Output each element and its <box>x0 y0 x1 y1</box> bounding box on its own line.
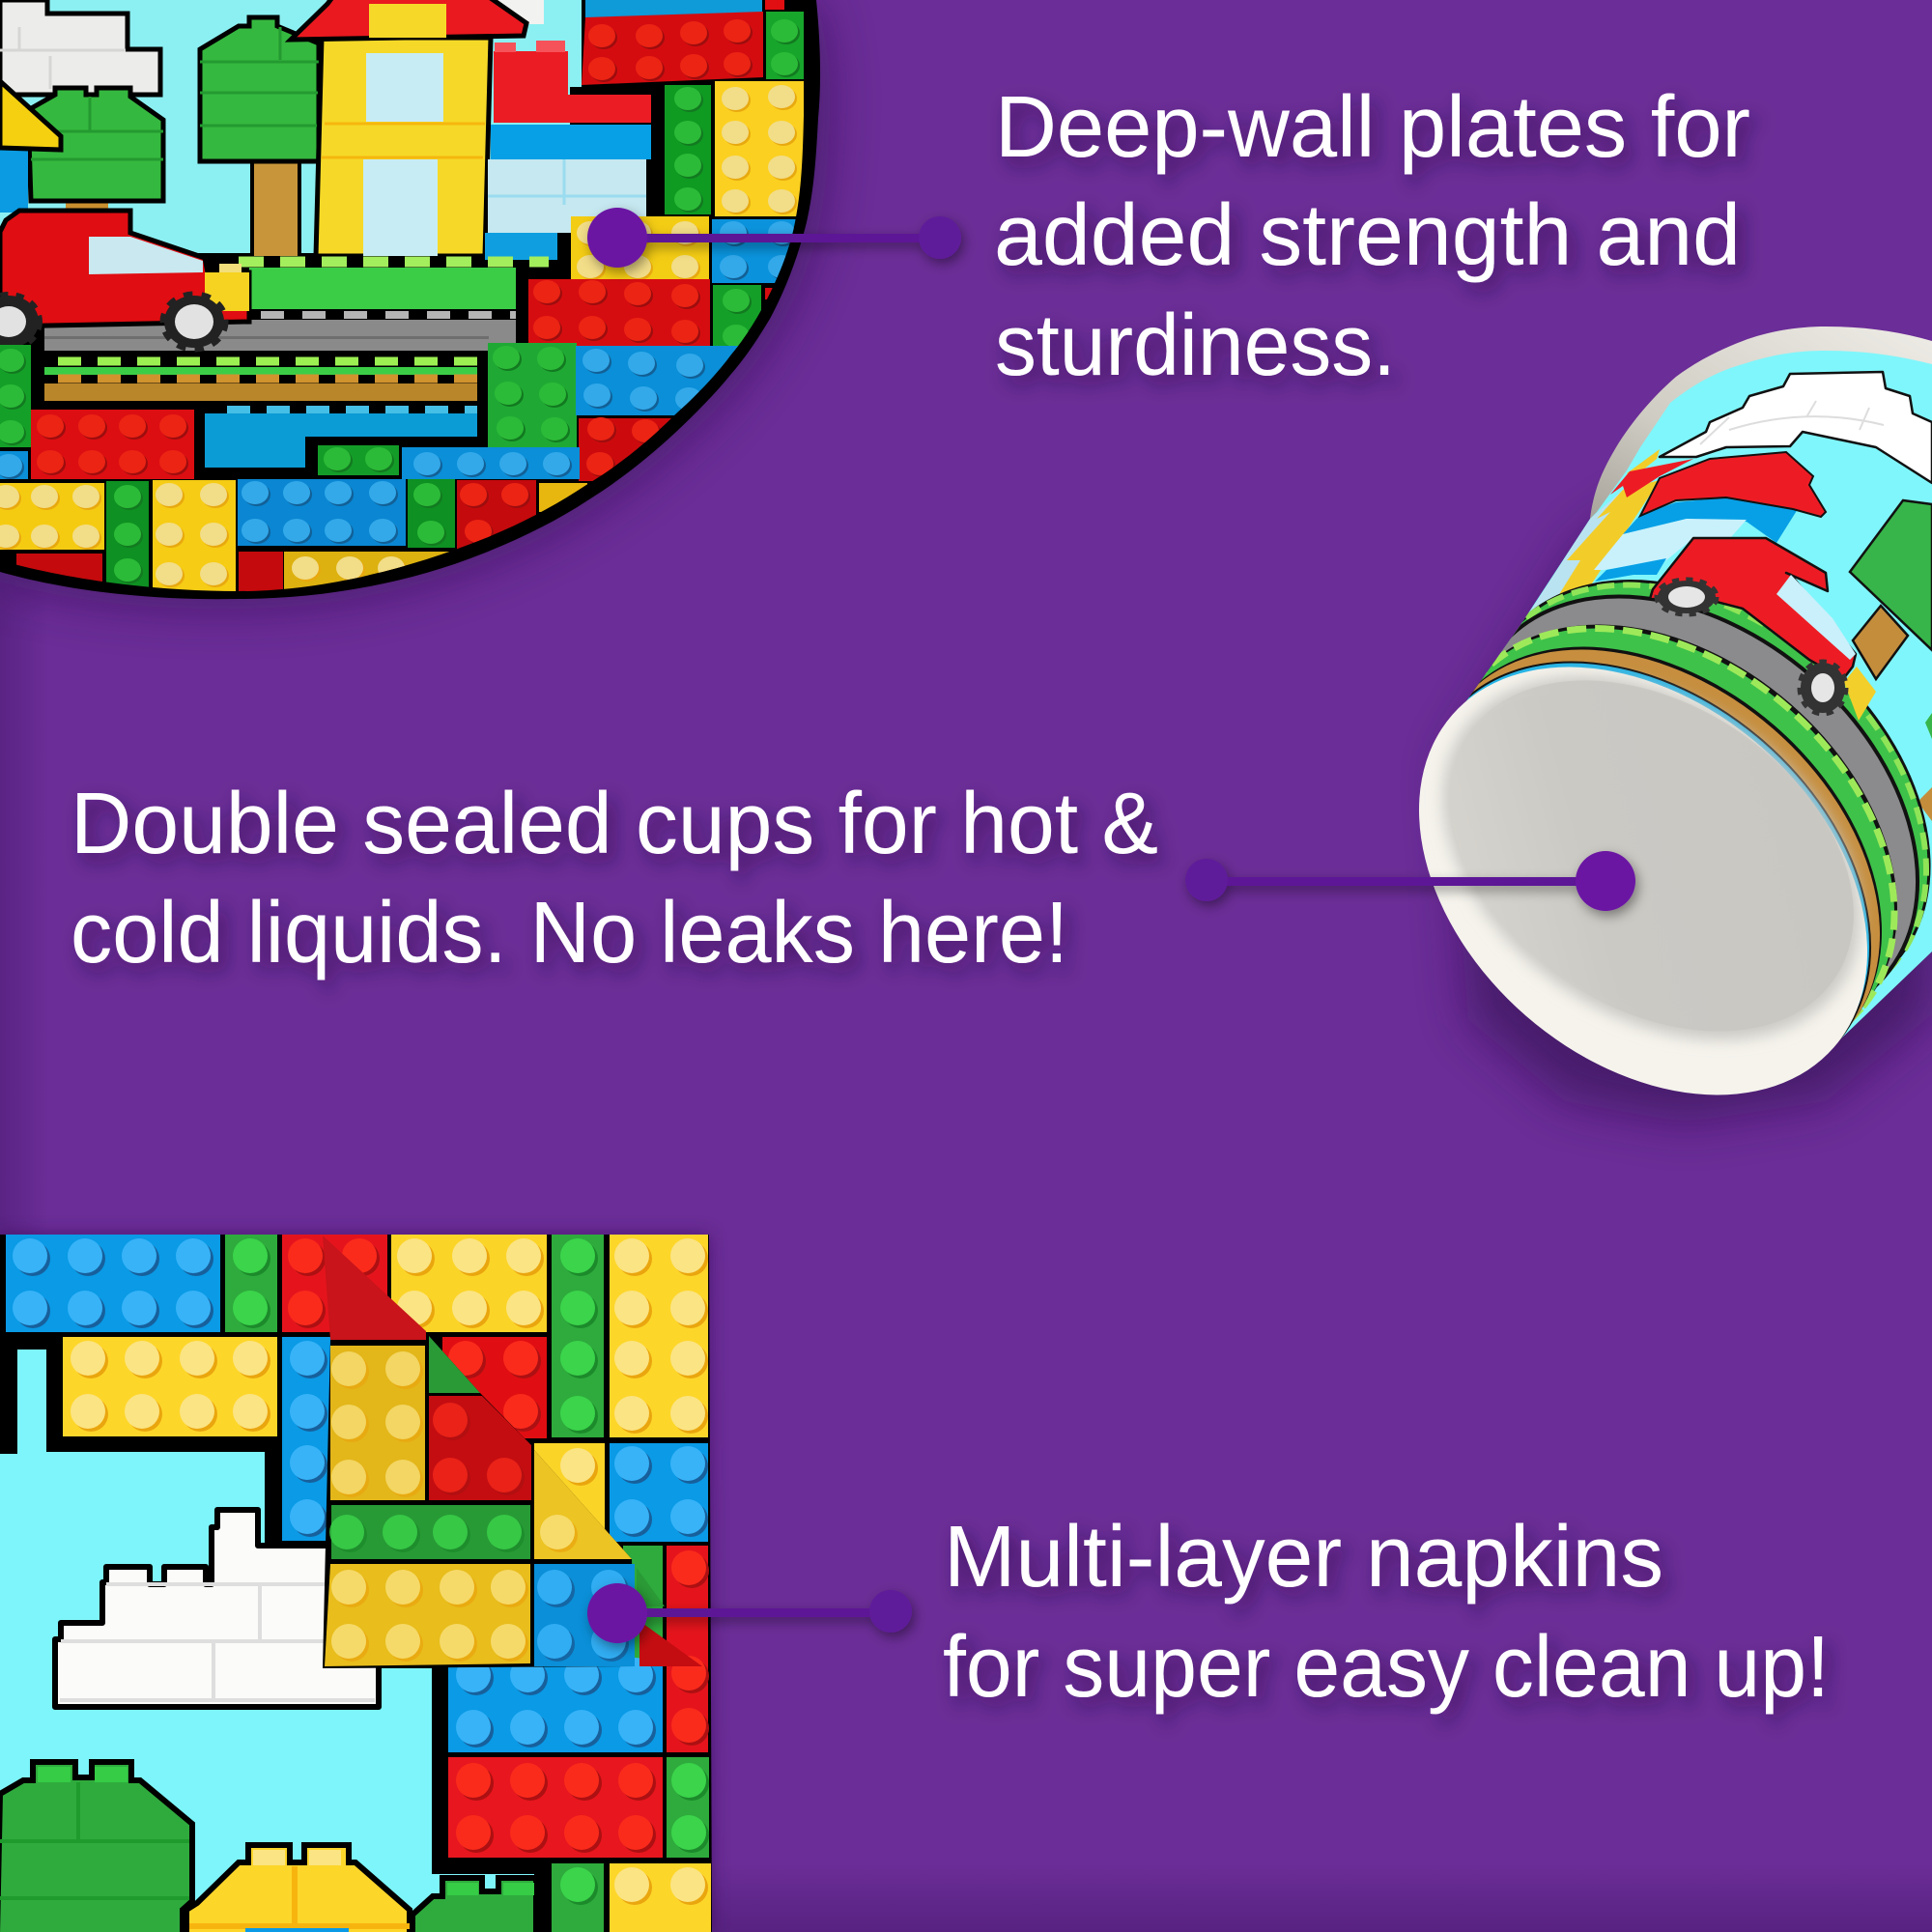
napkin folded corner <box>323 1236 702 1668</box>
napkin top bricks <box>6 1235 708 1437</box>
plate left tree <box>28 88 163 214</box>
cup base <box>1335 580 1932 1182</box>
text: cups: Double sealed cups for hot & <box>71 776 1158 872</box>
napkin lower bricks <box>448 1658 711 1932</box>
text: plates: Deep-wall plates for <box>995 79 1750 176</box>
panel: cup <box>1419 327 1932 1140</box>
connector: cup <box>1185 851 1635 911</box>
panel: deep-wall plate <box>0 0 831 609</box>
cup wall <box>1466 351 1932 1039</box>
end dot: napkin <box>869 1590 912 1633</box>
napkin middle bricks <box>63 1337 709 1752</box>
cup yellow house <box>1530 449 1693 611</box>
plate yellow house <box>291 0 526 256</box>
text: cups <box>71 776 1158 981</box>
text: plates: sturdiness. <box>995 298 1396 394</box>
napkin right tree <box>412 1878 536 1932</box>
cup red house <box>1594 452 1826 582</box>
plate cloud <box>0 0 544 95</box>
plate red and blue house <box>485 41 651 260</box>
plate centre tree <box>200 17 319 258</box>
cup colour bands <box>1466 580 1931 1040</box>
end dot: cup <box>1185 859 1228 901</box>
anchor dot: napkin <box>587 1583 647 1643</box>
cup rim <box>1590 327 1932 519</box>
napkin cloud <box>55 1510 379 1707</box>
connector: plate <box>587 208 961 268</box>
napkin yellow roof <box>186 1845 410 1932</box>
plate right bricks <box>488 0 807 481</box>
plate sky <box>0 0 582 253</box>
panel: napkin <box>0 1235 712 1932</box>
napkin left tree <box>0 1762 192 1932</box>
napkin sky <box>0 1452 534 1932</box>
end dot: plate <box>919 216 961 259</box>
plate roads and ground <box>44 262 549 468</box>
plate lower bricks <box>0 345 587 594</box>
anchor dot: cup <box>1576 851 1635 911</box>
text: napkins: for super easy clean up! <box>943 1619 1830 1716</box>
connector: napkin <box>587 1583 912 1643</box>
plate left roof <box>0 81 61 213</box>
plate red car <box>0 211 249 348</box>
anchor dot: plate <box>587 208 647 268</box>
text: plates: added strength and <box>994 187 1741 284</box>
cup tree <box>1850 500 1932 821</box>
cup cloud <box>1660 372 1932 483</box>
text: plates <box>994 79 1750 394</box>
text: cups: cold liquids. No leaks here! <box>71 885 1068 981</box>
text: napkins <box>943 1509 1830 1716</box>
cup red car <box>1650 538 1876 721</box>
text: napkins: Multi-layer napkins <box>944 1509 1663 1605</box>
